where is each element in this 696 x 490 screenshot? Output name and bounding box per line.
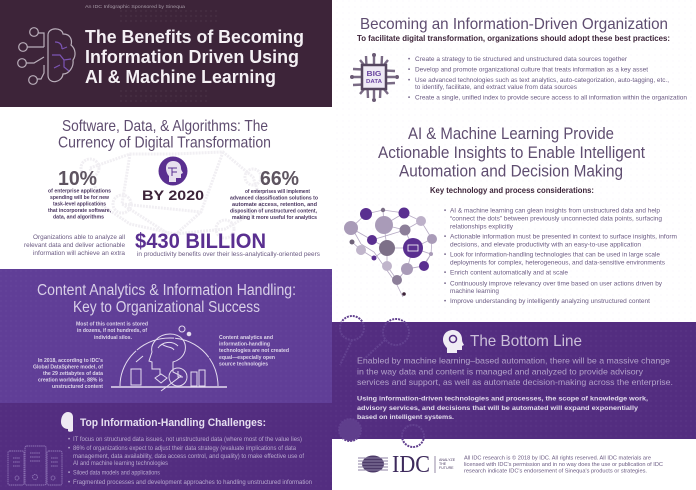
panel: top challenges: [0, 403, 332, 490]
stat: 10 percent: 10%: [58, 168, 97, 190]
text: technologies not equal: Content analytics and: [219, 335, 274, 341]
heading: The Bottom Line: [470, 333, 582, 350]
text: datasphere: [33, 358, 104, 390]
considerations list: Enrich content automatically and at scale: [450, 271, 569, 277]
text: datasphere: unstructured content: [52, 384, 103, 390]
heading: Automation and Decision Making: [399, 162, 623, 180]
challenges list: Siloed data models and applications: [73, 470, 160, 476]
best practices list: Develop and promote organizational culture that treats information as a key asset: [415, 67, 648, 73]
legal text: [464, 454, 663, 474]
icon: big data chip: BIG: [366, 71, 382, 78]
considerations list: •: [444, 209, 446, 215]
considerations list: “connect the dots” between previously unconnected data points, surfacing: [450, 217, 662, 223]
stat: 66 percent: advanced classification solutions to: [230, 196, 319, 202]
bold paragraph: [357, 396, 648, 421]
considerations list: Improve understanding by intelligently analyzing unstructured content: [450, 299, 650, 305]
organizations text: Organizations able to analyze all: [33, 235, 125, 241]
considerations list: •: [444, 253, 446, 259]
heading: AI & Machine Learning Provide: [408, 124, 614, 143]
icon: big data chip: DATA: [366, 79, 382, 85]
network background: [339, 316, 424, 447]
text: datasphere: In 2018, according to IDC's: [38, 358, 103, 364]
best practices list: •: [408, 67, 410, 73]
legal text: All IDC research is © 2018 by IDC. All rights reserved. All IDC materials are: [464, 454, 651, 462]
considerations list: •: [444, 281, 446, 287]
paragraph: Enabled by machine learning–based automation, there will be a massive change: [357, 356, 670, 366]
considerations list: Look for information-handling technologies that can be used in large scale: [450, 253, 661, 259]
challenges list: •: [68, 470, 70, 476]
logo: IDC: IDC: [392, 452, 430, 478]
best practices list: •: [408, 78, 410, 84]
productivity text: in productivity benefits over their less-analytically-oriented peers: [137, 252, 320, 258]
stat: 10 percent: spending will be for new: [50, 195, 110, 201]
icon: servers: [8, 446, 62, 485]
stat: 10 percent: data, and algorithms: [53, 214, 104, 220]
organizations text: information will achieve an extra: [33, 251, 126, 257]
stat: 10 percent: of enterprise applications: [48, 188, 111, 194]
challenges list: Fragmented processes and development approaches to handling unstructured information: [73, 480, 312, 486]
organizations text: relevant data and deliver actionable: [24, 243, 126, 249]
title: The Benefits of Becoming: [85, 26, 304, 47]
text: datasphere: Global DataSphere model, of: [33, 364, 103, 370]
text: content stored: Most of this content is stored: [76, 322, 149, 328]
paragraph: [357, 356, 673, 387]
text: content stored: individual silos.: [94, 335, 132, 341]
stat: 10 percent: [48, 168, 111, 220]
panel: bottom line: [332, 316, 696, 447]
heading: Content Analytics & Information Handling:: [37, 282, 296, 299]
heading: Currency of Digital Transformation: [58, 134, 271, 152]
challenges list: IT focus on structured data issues, not unstructured data (where most of the value lies): [73, 437, 302, 443]
challenges list: AI and machine learning technologies: [73, 461, 168, 467]
text: content stored: [76, 322, 149, 341]
network background: [81, 152, 263, 238]
stat: 66 percent: 66%: [260, 168, 299, 190]
icon: head in circle: [158, 156, 188, 186]
challenges list: 86% of organizations expect to adjust their data strategy (evaluate implications of data: [73, 446, 297, 452]
considerations list: •: [444, 271, 446, 277]
logo: IDC: [358, 452, 456, 478]
legal text: licensed with IDC's permission and in no way does the use or publication of IDC: [464, 462, 663, 468]
considerations list: decisions, and elevate productivity with an easy-to-use application: [450, 243, 641, 249]
considerations list: deployments for complex, heterogeneous, and data-sensitive environments: [450, 261, 665, 267]
by 2020: BY 2020: [142, 187, 204, 203]
bold paragraph: advisory services, and decisions that will be automated will expand exponentially: [357, 405, 638, 412]
panel: IDC footer: [358, 452, 663, 478]
considerations list: •: [444, 299, 446, 305]
challenges list: •: [68, 480, 70, 486]
logo: IDC: FUTURE: [439, 466, 454, 470]
icon: brain network: [344, 208, 437, 297]
bold paragraph: based on intelligent systems.: [357, 414, 454, 421]
stat: 66 percent: disposition of unstructured content,: [230, 208, 317, 214]
stat: 66 percent: making it more useful for analytics: [232, 215, 317, 221]
considerations list: AI & machine learning can glean insights from unstructured data and help: [450, 209, 661, 215]
stat: 430 billion: $430 BILLION: [135, 230, 266, 253]
considerations list: Actionable information must be presented in context to surface insights, inform: [450, 235, 677, 241]
organizations text: [24, 235, 126, 257]
panel: software, data and algorithms: [0, 107, 332, 269]
best practices list: Use advanced technologies such as text analytics, auto-categorization, auto-tagging, etc.,: [415, 78, 669, 84]
logo: IDC: THE: [439, 462, 447, 466]
text: content stored: in dozens, if not hundreds, of: [77, 328, 147, 334]
best practices list: to identify, facilitate, and extract value from data sources: [415, 85, 577, 91]
heading: Key to Organizational Success: [73, 299, 260, 316]
panel: information-driven organization: [350, 16, 687, 102]
heading: Becoming an Information-Driven Organization: [360, 16, 668, 33]
text: technologies not equal: information-handling: [219, 342, 271, 348]
heading: [37, 282, 296, 316]
icon: head: [61, 412, 73, 432]
subheading: Key technology and process considerations:: [430, 185, 594, 195]
icon: big data chip: [350, 53, 399, 102]
title: [85, 26, 304, 87]
best practices list: Create a single, unified index to provide secure access to all information within the organization: [415, 95, 687, 101]
text: datasphere: creation worldwide, 88% is: [38, 378, 103, 384]
stat: 66 percent: [230, 168, 319, 221]
stat: 66 percent: of enterprises will implement: [245, 189, 310, 195]
legal text: research indicate IDC's endorsement of Sinequa's products or strategies.: [464, 468, 647, 474]
panel: AI and machine learning insights: [344, 124, 677, 305]
text: technologies not equal: [219, 335, 290, 368]
stat: 10 percent: that incorporate software,: [48, 208, 111, 214]
logo: IDC: ANALYZE: [439, 458, 456, 462]
stat: 10 percent: task-level applications: [53, 202, 106, 208]
bold paragraph: Using information-driven technologies and processes, the scope of knowledge work,: [357, 396, 648, 402]
heading: [58, 118, 271, 152]
best practices list: [408, 57, 687, 101]
title: Information Driven Using: [85, 46, 299, 67]
heading: Software, Data, & Algorithms: The: [62, 118, 268, 135]
panel: content analytics: [0, 269, 332, 403]
best practices list: Create a strategy to tie structured and unstructured data sources together: [415, 57, 627, 63]
text: technologies not equal: technologies are not created: [219, 348, 290, 354]
panel: header: [0, 0, 332, 107]
heading: Top Information-Handling Challenges:: [80, 417, 266, 429]
text: datasphere: the 29 zettabytes of data: [43, 371, 104, 377]
challenges list: [68, 437, 312, 486]
illustration: dome with head: [111, 326, 227, 391]
considerations list: [444, 209, 677, 305]
heading: Actionable Insights to Enable Intelligent: [378, 143, 645, 162]
icon: brain circuit: [18, 28, 75, 84]
title: AI & Machine Learning: [85, 66, 276, 87]
best practices list: •: [408, 57, 410, 63]
considerations list: relationships explicitly: [450, 225, 513, 231]
icon: head with gear: [443, 330, 464, 353]
considerations list: •: [444, 235, 446, 241]
text: technologies not equal: equal—especially open: [219, 355, 276, 361]
challenges list: management, data availability, data access control, and quality) to make effective use of: [73, 454, 304, 460]
sponsor line: An IDC Infographic Sponsored by Sinequa: [85, 4, 186, 9]
considerations list: machine learning: [450, 289, 499, 295]
paragraph: services and support, as well as automate decision-making across the enterprise.: [357, 377, 673, 387]
subheading: To facilitate digital transformation, organizations should adopt these best practices:: [357, 33, 670, 43]
challenges list: •: [68, 446, 70, 452]
text: technologies not equal: source technologies: [219, 362, 268, 368]
stat: 66 percent: automate access, retention, and: [232, 202, 318, 208]
heading: [378, 124, 645, 180]
paragraph: in the way data and content is managed and analyzed to provide advisory: [357, 366, 644, 376]
challenges list: •: [68, 437, 70, 443]
best practices list: •: [408, 95, 410, 101]
considerations list: Continuously improve relevancy over time based on user actions driven by: [450, 281, 662, 287]
